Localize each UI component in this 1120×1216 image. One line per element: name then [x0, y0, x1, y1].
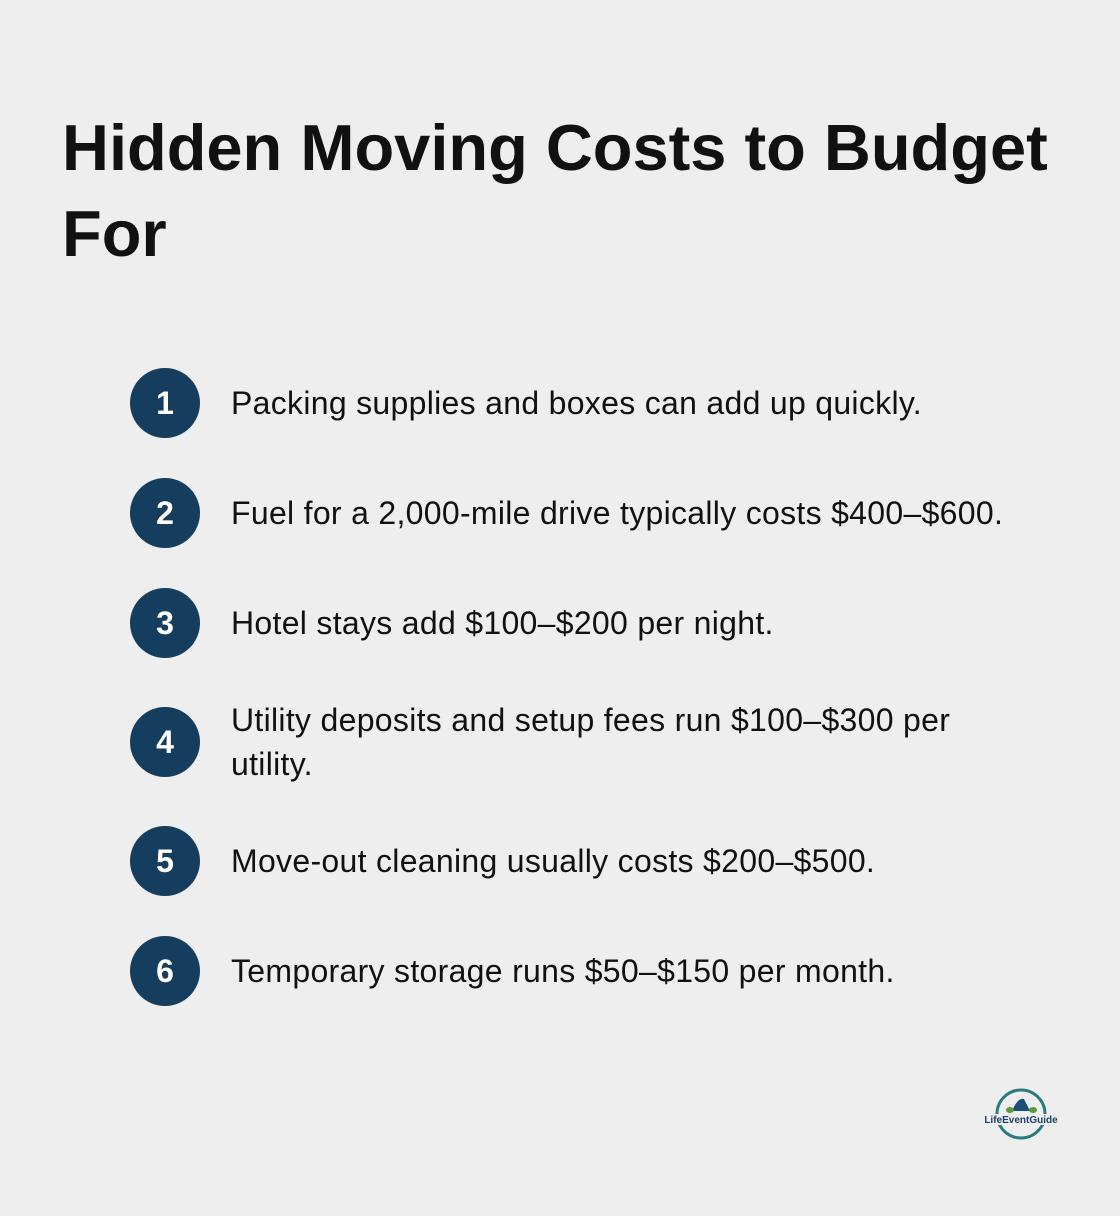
item 1: 1: [156, 385, 174, 421]
item 5: [130, 826, 875, 896]
item 1: Packing supplies and boxes can add up quickly.: [231, 385, 922, 421]
item 5: 5: [156, 843, 174, 879]
title: Hidden Moving Costs to Budget For: [62, 111, 1048, 270]
item 6: Temporary storage runs $50–$150 per month.: [231, 953, 895, 989]
item 3: [130, 588, 774, 658]
item 3: Hotel stays add $100–$200 per night.: [231, 605, 774, 641]
logo: [984, 1088, 1058, 1140]
item 3: 3: [156, 605, 174, 641]
item 2: 2: [156, 495, 174, 531]
item 2: [130, 478, 1003, 548]
item 6: 6: [156, 953, 174, 989]
item 2: Fuel for a 2,000-mile drive typically costs $400–$600.: [231, 495, 1003, 531]
logo: LifeEventGuide: [984, 1115, 1058, 1126]
item 4: Utility deposits and setup fees run $100–$300 per utility.: [231, 702, 950, 782]
item 4: 4: [156, 724, 174, 760]
item 6: [130, 936, 895, 1006]
item 1: [130, 368, 922, 438]
item 5: Move-out cleaning usually costs $200–$500.: [231, 843, 875, 879]
